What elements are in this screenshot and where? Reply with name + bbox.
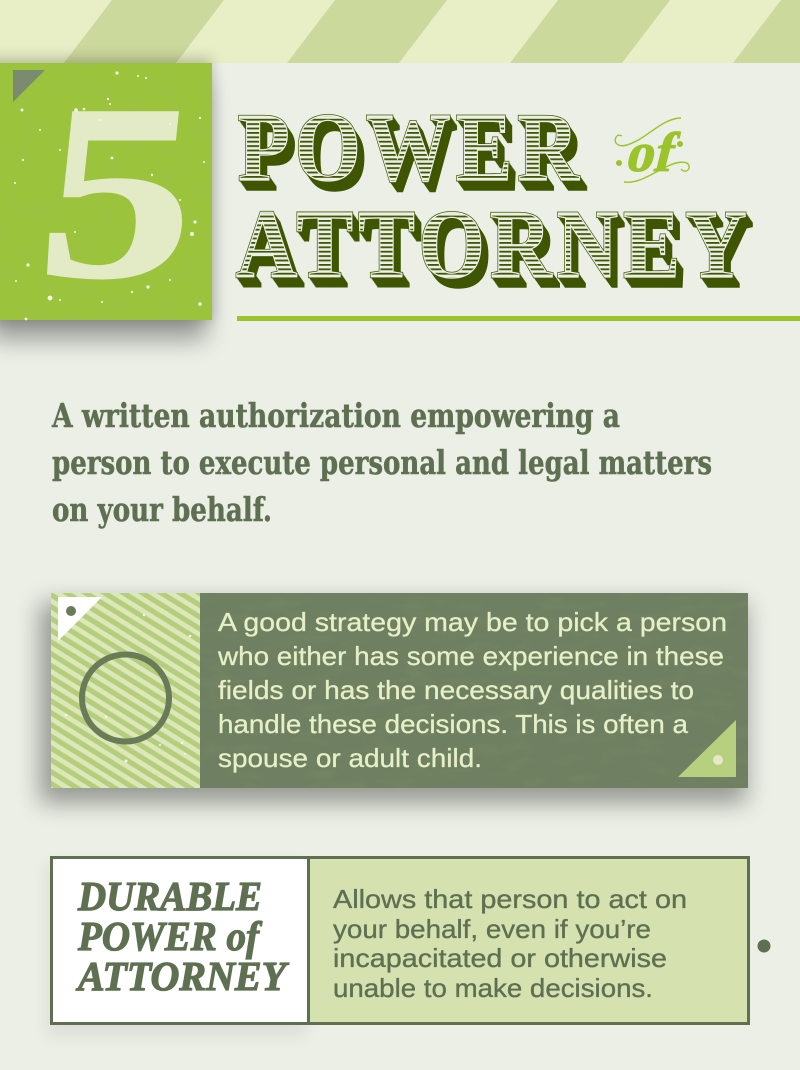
- tile corner dot: [66, 606, 76, 616]
- callout text: handle these decisions. This is often a: [218, 709, 689, 739]
- striped icon tile: [51, 593, 200, 788]
- title line: POWER: POWER: [244, 103, 590, 211]
- title line: POWER: POWER: [239, 96, 585, 204]
- title line: POWER: POWER: [238, 94, 584, 202]
- title: [236, 94, 759, 309]
- side dot: [758, 940, 770, 952]
- callout text: who either has some experience in these: [217, 641, 724, 671]
- title line: POWER: POWER: [242, 100, 588, 208]
- callout text: A good strategy may be to pick a person: [218, 607, 727, 637]
- callout text: spouse or adult child.: [218, 743, 482, 773]
- tile corner triangle: [58, 597, 102, 641]
- definition text: [333, 884, 687, 1003]
- definition text: Allows that person to act on: [333, 884, 687, 914]
- corner triangle: [13, 70, 45, 102]
- ornament: of: of: [621, 122, 684, 184]
- title line: POWER: POWER: [242, 99, 588, 207]
- panel: durable power of attorney: [45, 858, 770, 1038]
- title line: POWER: POWER: [239, 95, 585, 203]
- panel: number five square: [0, 54, 212, 340]
- title line: POWER: POWER: [244, 102, 590, 210]
- term heading: POWER of: [77, 913, 263, 959]
- term heading: ATTORNEY: [75, 953, 290, 999]
- definition text: incapacitated or otherwise: [333, 943, 667, 973]
- icon: ring: [82, 654, 169, 742]
- panel: strategy callout: [40, 593, 748, 803]
- title line: POWER: POWER: [241, 98, 587, 206]
- title rule: [237, 316, 800, 321]
- definition text: [51, 396, 712, 529]
- definition box: [308, 858, 748, 1024]
- term heading: DURABLE: [77, 873, 262, 919]
- corner triangle: [678, 720, 736, 777]
- top striped banner: [0, 0, 800, 63]
- callout text: [217, 607, 727, 773]
- tile specks: [65, 614, 191, 762]
- text panel background: [200, 593, 748, 788]
- title line: POWER: POWER: [245, 104, 591, 212]
- definition text: A written authorization empowering a: [51, 396, 620, 435]
- number 5: 5: [28, 54, 210, 331]
- term heading: [75, 873, 290, 999]
- title line: POWER: POWER: [240, 97, 586, 205]
- definition text: your behalf, even if you’re: [333, 914, 651, 944]
- term box: [52, 858, 308, 1024]
- title line: POWER: POWER: [243, 101, 589, 209]
- definition text: unable to make decisions.: [333, 973, 653, 1003]
- paint specks: [14, 71, 205, 320]
- title line: POWER: POWER: [238, 94, 584, 202]
- corner dot: [713, 755, 723, 765]
- callout text: fields or has the necessary qualities to: [218, 675, 694, 705]
- definition text: on your behalf.: [52, 490, 272, 529]
- definition text: person to execute personal and legal matters: [52, 443, 712, 482]
